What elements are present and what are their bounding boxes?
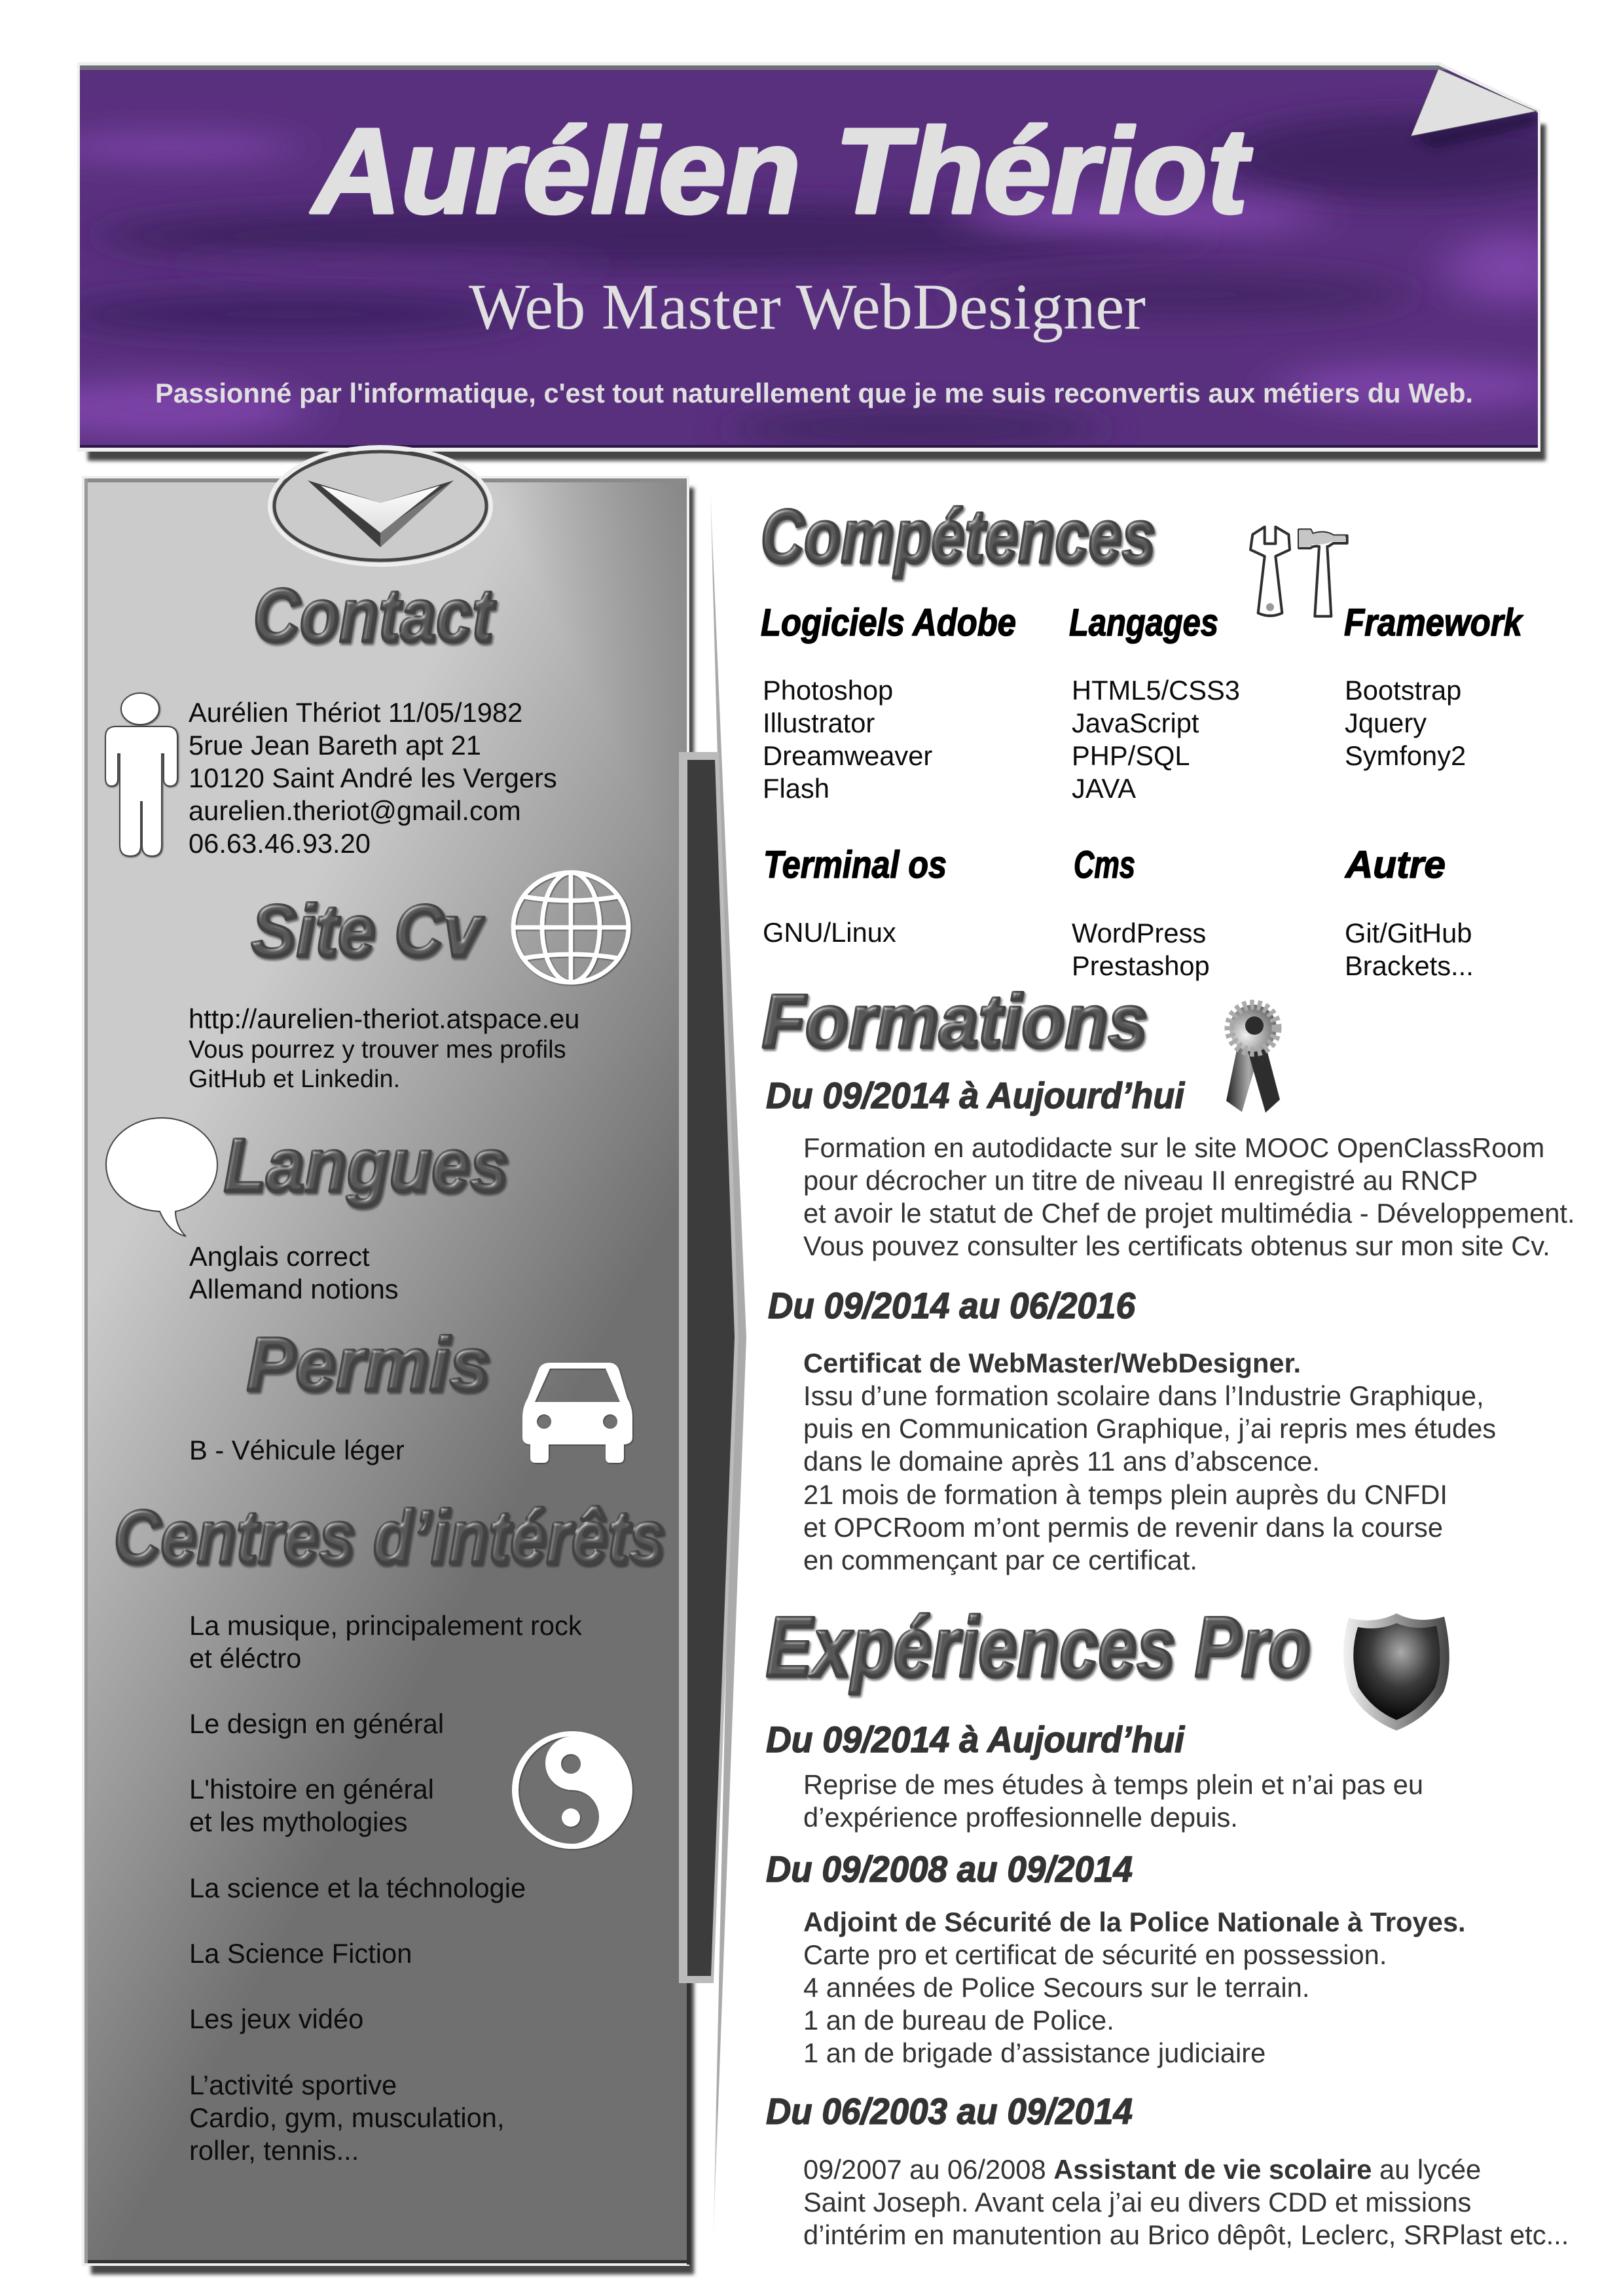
icon: yin yang (512, 1731, 632, 1849)
text block: contact details (189, 697, 557, 859)
experience entry 3: d’intérim en manutention au Brico dêpôt, Leclerc, SRPlast etc... (803, 2219, 1569, 2250)
text block: contact details: 10120 Saint André les Vergers (189, 762, 557, 793)
competences group: Cms: Cms (1074, 844, 1135, 886)
formation entry 1: Formation en autodidacte sur le site MOOC OpenClassRoom (803, 1132, 1544, 1163)
folded corner (1411, 69, 1537, 136)
competences group: Framework (1344, 601, 1523, 771)
text block: contact details: Aurélien Thériot 11/05/1982 (189, 697, 522, 728)
competences group: Framework: Jquery (1345, 708, 1427, 738)
icon: person (105, 693, 177, 856)
header banner (7, 62, 1597, 461)
experience entry 2: 1 an de brigade d’assistance judiciaire (803, 2037, 1266, 2068)
competences group: Langages: Langages (1069, 601, 1218, 644)
text block: site details: Vous pourrez y trouver mes profils (189, 1036, 566, 1064)
competences group: Autre (1344, 844, 1474, 981)
text block: contact details: 06.63.46.93.20 (189, 828, 371, 859)
name title: Aurélien Thériot (310, 104, 1252, 239)
competences group: Cms: WordPress (1072, 918, 1206, 948)
competences group: Langages (1069, 601, 1240, 804)
text block: interests: et éléctro (189, 1643, 301, 1674)
formation entry 2: en commençant par ce certificat. (803, 1545, 1197, 1575)
experience entry 1: Reprise de mes études à temps plein et n’ai pas eu (803, 1769, 1423, 1800)
icon: wrench and hammer (1250, 527, 1347, 617)
text block: interests: La Science Fiction (189, 1938, 412, 1969)
competences group: Langages: PHP/SQL (1072, 740, 1190, 771)
experience entry 1: d’expérience proffesionnelle depuis. (803, 1802, 1238, 1833)
experience entry 2: 4 années de Police Secours sur le terrain. (803, 1972, 1309, 2003)
heading: Centres d'intérêts: Centres d’intérêts (114, 1496, 665, 1579)
competences group: Logiciels Adobe: Logiciels Adobe (761, 601, 1016, 644)
experience entry 2: Du 09/2008 au 09/2014 (766, 1848, 1133, 1890)
text block: site details: GitHub et Linkedin. (189, 1066, 400, 1093)
text block: interests: Le design en général (189, 1708, 444, 1739)
text block: interests: L’activité sportive (189, 2070, 397, 2100)
competences group: Cms: Prestashop (1072, 950, 1210, 981)
competences group: Framework: Framework (1344, 601, 1523, 644)
formation entry 2: et OPCRoom m’ont permis de revenir dans la course (803, 1512, 1443, 1543)
experience entry 3: Saint Joseph. Avant cela j’ai eu divers CDD et missions (803, 2187, 1471, 2217)
formation entry 2: dans le domaine après 11 ans d’abscence. (803, 1446, 1320, 1477)
formation entry 2 (768, 1285, 1496, 1575)
text block: interests (189, 1610, 582, 2166)
formation entry 2: Issu d’une formation scolaire dans l’Industrie Graphique, (803, 1380, 1484, 1411)
tagline: Passionné par l'informatique, c'est tout naturellement que je me suis reconvertis aux métiers du Web. (155, 378, 1473, 408)
competences group: Autre: Brackets... (1345, 950, 1474, 981)
text block: interests: Les jeux vidéo (189, 2003, 363, 2034)
experience entry 2 (766, 1848, 1466, 2068)
experience entry 1 (766, 1719, 1423, 1833)
competences group: Logiciels Adobe: Flash (763, 773, 829, 804)
arrow column (679, 490, 746, 2265)
competences group: Autre: Git/GitHub (1345, 918, 1472, 948)
text block: languages: Anglais correct (189, 1241, 370, 1272)
text block: interests: roller, tennis... (189, 2135, 359, 2166)
competences group: Terminal os (763, 844, 947, 948)
formation entry 2: 21 mois de formation à temps plein auprès du CNFDI (803, 1479, 1448, 1510)
experience entry 3: Du 06/2003 au 09/2014 (766, 2090, 1133, 2132)
formation entry 1: Du 09/2014 à Aujourd’hui (766, 1075, 1185, 1116)
job subtitle: Web Master WebDesigner (469, 270, 1146, 343)
text block: contact details: aurelien.theriot@gmail.com (189, 795, 521, 826)
heading: Formations: Formations (762, 980, 1148, 1064)
experience entry 2: Adjoint de Sécurité de la Police Nationale à Troyes. (803, 1907, 1466, 1937)
text block: site details: http://aurelien-theriot.atspace.eu (189, 1003, 579, 1034)
text block: contact details: 5rue Jean Bareth apt 21 (189, 730, 481, 761)
experience entry 1: Du 09/2014 à Aujourd’hui (766, 1719, 1185, 1760)
competences group: Langages: HTML5/CSS3 (1072, 675, 1240, 706)
icon: ribbon rosette (1226, 1005, 1280, 1113)
text block: languages (189, 1241, 399, 1304)
competences group: Logiciels Adobe: Illustrator (763, 708, 875, 738)
left sidebar panel (82, 476, 694, 2274)
competences group: Terminal os: GNU/Linux (763, 917, 896, 948)
text block: site details (189, 1003, 579, 1093)
heading: Langues: Langues (224, 1124, 509, 1208)
text block: licence: B - Véhicule léger (189, 1435, 405, 1465)
formation entry 1: Vous pouvez consulter les certificats obtenus sur mon site Cv. (803, 1230, 1550, 1261)
experience entry 3: 09/2007 au 06/2008 Assistant de vie scolaire au lycée (803, 2154, 1481, 2185)
formation entry 2: puis en Communication Graphique, j’ai repris mes études (803, 1413, 1496, 1444)
icon: car (522, 1363, 632, 1463)
competences group: Logiciels Adobe: Photoshop (763, 675, 893, 706)
heading: Site Cv: Site Cv (251, 890, 484, 972)
text block: interests: L'histoire en général (189, 1774, 434, 1804)
text block: interests: La science et la téchnologie (189, 1873, 526, 1903)
formation entry 1: pour décrocher un titre de niveau II enregistré au RNCP (803, 1165, 1478, 1196)
competences group: Cms (1072, 844, 1210, 981)
experience entry 2: Carte pro et certificat de sécurité en possession. (803, 1939, 1387, 1970)
competences group: Langages: JAVA (1072, 773, 1136, 804)
formation entry 2: Du 09/2014 au 06/2016 (768, 1285, 1136, 1326)
heading: Permis: Permis (247, 1323, 490, 1407)
competences group: Framework: Symfony2 (1345, 740, 1466, 771)
competences group: Logiciels Adobe: Dreamweaver (763, 740, 932, 771)
competences group: Autre: Autre (1344, 844, 1446, 886)
formation entry 1 (766, 1075, 1575, 1261)
competences group: Terminal os: Terminal os (763, 844, 947, 886)
experience entry 3 (766, 2090, 1569, 2250)
competences group: Langages: JavaScript (1072, 708, 1199, 738)
competences group: Framework: Bootstrap (1345, 675, 1461, 706)
icon: shield (1343, 1613, 1449, 1731)
formation entry 1: et avoir le statut de Chef de projet multimédia - Développement. (803, 1198, 1575, 1229)
icon: globe (513, 872, 628, 982)
text block: interests: La musique, principalement rock (189, 1610, 582, 1641)
competences group: Logiciels Adobe (761, 601, 1016, 804)
text block: interests: et les mythologies (189, 1806, 407, 1837)
heading: Expériences Pro: Expériences Pro (766, 1599, 1311, 1695)
formation entry 2: Certificat de WebMaster/WebDesigner. (803, 1348, 1301, 1378)
text block: interests: Cardio, gym, musculation, (189, 2102, 505, 2133)
heading: Compétences: Compétences (761, 495, 1156, 579)
experience entry 2: 1 an de bureau de Police. (803, 2005, 1114, 2036)
chevron badge icon (270, 447, 491, 565)
heading: Contact: Contact (253, 574, 496, 658)
icon: speech bubble (106, 1118, 217, 1236)
text block: languages: Allemand notions (189, 1274, 399, 1304)
